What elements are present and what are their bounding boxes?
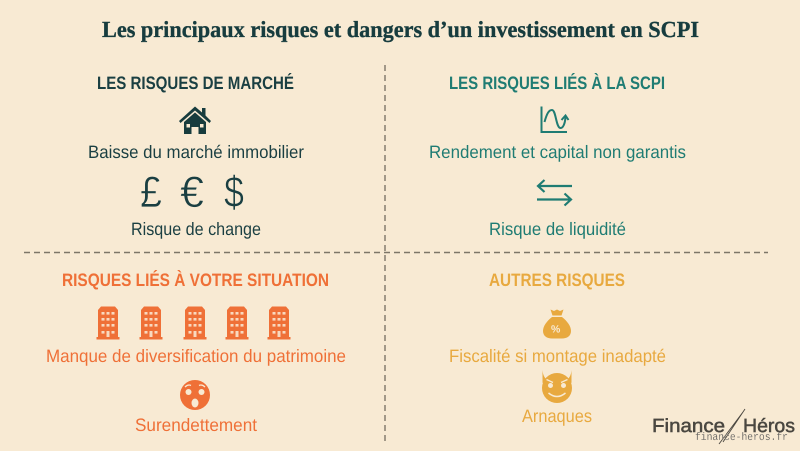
icon: money bag: % (551, 324, 561, 336)
label: rendement: Rendement et capital non garantis (429, 142, 686, 162)
label: surendettement: Surendettement (135, 415, 257, 435)
watermark: site url: finance-heros.fr (695, 432, 788, 444)
title: Les principaux risques et dangers d’un investissement en SCPI (102, 17, 699, 43)
icon: currencies: £ (140, 168, 162, 217)
icon: currencies: € (180, 168, 204, 217)
label: risque de change: Risque de change (131, 219, 261, 239)
logo: Finance Héros: Héros (743, 416, 795, 437)
icon: shocked face (180, 380, 210, 410)
icon: chart (542, 106, 568, 132)
panel: risques liés à la SCPI (429, 73, 686, 239)
icon: five buildings (96, 306, 290, 340)
icon: exchange arrows (537, 180, 572, 206)
panel: autres risques (449, 270, 666, 426)
icon: currencies: $ (224, 168, 244, 217)
label: arnaques: Arnaques (522, 406, 592, 426)
heading: situation: RISQUES LIÉS À VOTRE SITUATION (62, 270, 329, 290)
icon: money bag (543, 310, 571, 338)
panel: risques liés à votre situation (46, 270, 346, 435)
icon: devil face (542, 370, 572, 403)
logo: Finance Héros: Finance (652, 416, 725, 437)
icon: currencies (140, 168, 244, 217)
panel: risques de marché (88, 73, 304, 239)
heading: SCPI: LES RISQUES LIÉS À LA SCPI (449, 73, 665, 93)
icon: house (179, 106, 211, 134)
logo: Finance Héros (652, 409, 795, 444)
label: liquidité: Risque de liquidité (489, 219, 626, 239)
heading: autres: AUTRES RISQUES (489, 270, 625, 290)
label: diversification: Manque de diversification du patrimoine (46, 346, 346, 366)
label: baisse du marché: Baisse du marché immobilier (88, 142, 304, 162)
label: fiscalité: Fiscalité si montage inadapté (449, 346, 666, 366)
heading: marché: LES RISQUES DE MARCHÉ (97, 73, 294, 93)
